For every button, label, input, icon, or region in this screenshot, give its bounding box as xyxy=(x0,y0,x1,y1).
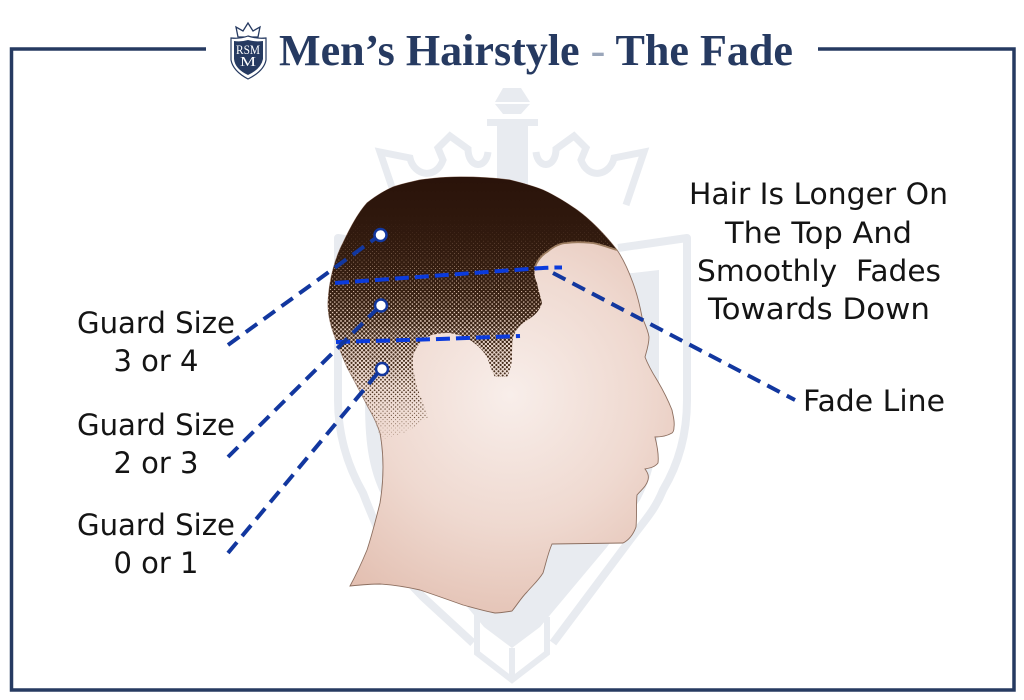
text: hair description: Smoothly Fades xyxy=(697,254,941,288)
watermark: crown xyxy=(380,136,644,205)
leader line: guard size 3 or 4 xyxy=(228,235,380,345)
watermark: shield and sword crest xyxy=(338,88,687,680)
watermark: outer shield xyxy=(338,238,687,643)
hair: halftone fade dots xyxy=(328,177,616,440)
label: guard size 2 or 3: 2 or 3 xyxy=(114,446,198,480)
label: fade line: Fade Line xyxy=(803,384,945,418)
logo: shield crest: M xyxy=(240,55,257,70)
text: hair description xyxy=(689,177,948,326)
label: guard size 2 or 3: Guard Size xyxy=(77,408,235,442)
head profile xyxy=(328,177,674,613)
leader line: guard size 0 or 1 xyxy=(228,368,382,553)
label: guard size 2 or 3 xyxy=(77,408,235,480)
upper fade line xyxy=(335,268,562,283)
watermark: sword pommel, guard and blade xyxy=(487,88,538,262)
label: guard size 0 or 1: Guard Size xyxy=(77,508,235,542)
label: guard size 0 or 1: 0 or 1 xyxy=(114,546,198,580)
logo: shield crest: RSM xyxy=(236,42,260,57)
hairline edge xyxy=(535,242,617,267)
title: Men’s Hairstyle - The Fade xyxy=(279,26,793,75)
lower fade line xyxy=(336,336,520,342)
watermark: inner shield fill xyxy=(365,270,659,648)
leader line: fade line xyxy=(553,273,795,400)
text: hair description: The Top And xyxy=(724,216,912,250)
marker: lower zone xyxy=(376,363,388,375)
text: hair description: Towards Down xyxy=(707,292,930,326)
watermark: sword tip xyxy=(477,613,547,680)
text: hair description: Hair Is Longer On xyxy=(689,177,948,211)
leader line: guard size 2 or 3 xyxy=(228,305,381,457)
label: guard size 3 or 4: Guard Size xyxy=(77,306,235,340)
label: guard size 3 or 4: 3 or 4 xyxy=(114,344,198,378)
marker: top zone xyxy=(374,229,386,241)
label: guard size 0 or 1 xyxy=(77,508,235,580)
title group xyxy=(231,23,793,79)
logo: shield crest xyxy=(231,23,266,79)
marker: middle zone xyxy=(375,300,387,312)
label: guard size 3 or 4 xyxy=(77,306,235,378)
